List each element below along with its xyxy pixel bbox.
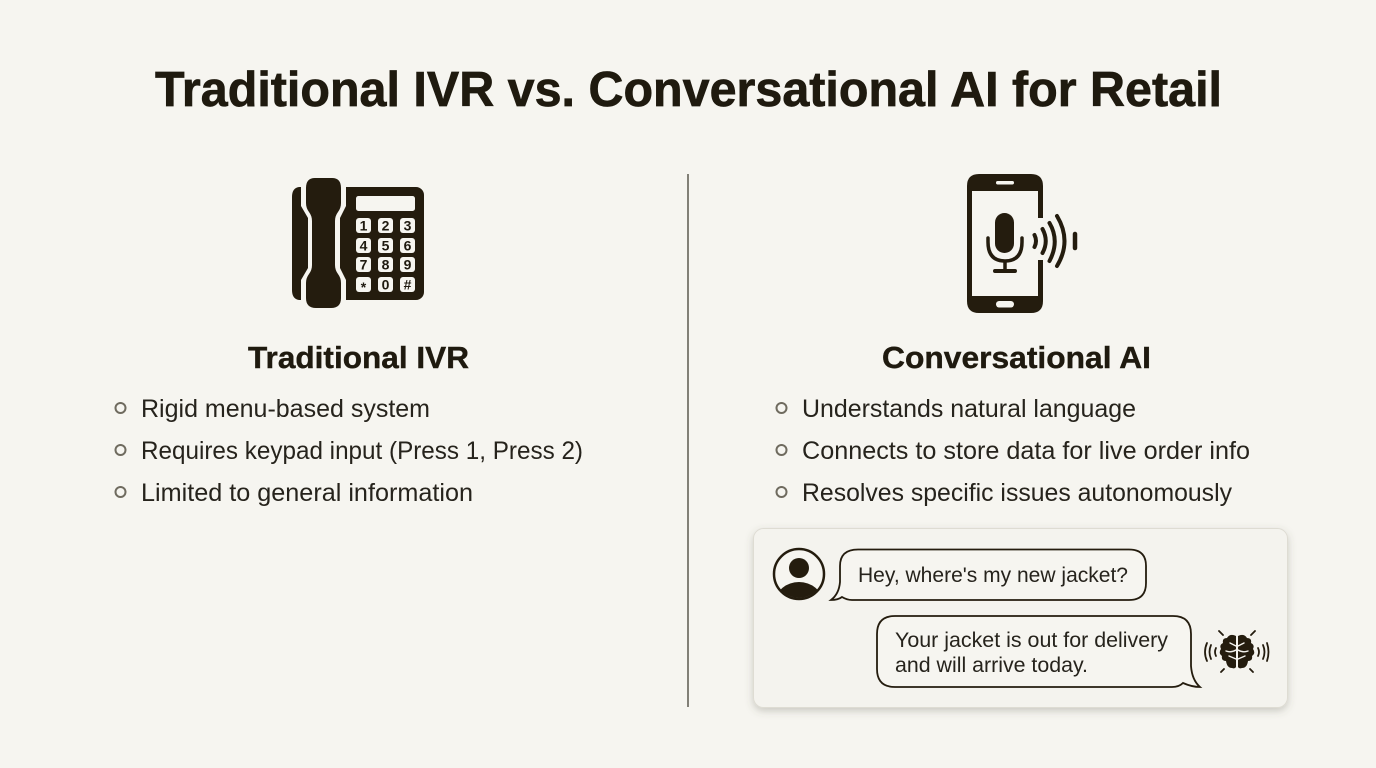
icon: customer avatar <box>772 548 826 600</box>
list: IVR limitations <box>116 395 583 507</box>
heading: Traditional IVR: Traditional IVR <box>248 340 469 375</box>
speech bubble: AI answer: Your jacket is out for delivery <box>895 629 1168 652</box>
divider <box>687 174 689 707</box>
list: AI capabilities <box>776 395 1250 507</box>
speech bubble: customer question: Hey, where's my new jacket? <box>858 564 1128 587</box>
panel: traditional IVR <box>116 178 583 507</box>
bullet: store data: Connects to store data for live order info <box>802 437 1250 465</box>
icon: desk telephone with keypad <box>292 178 424 308</box>
icon: desk telephone with keypad: 4 <box>360 238 368 254</box>
icon: desk telephone with keypad: # <box>404 276 412 292</box>
icon: desk telephone with keypad: 8 <box>382 256 390 272</box>
bullet: general information: Limited to general information <box>141 479 473 507</box>
icon: desk telephone with keypad: 3 <box>404 218 412 234</box>
icon: desk telephone with keypad: 5 <box>382 238 390 254</box>
speech bubble: customer question <box>831 550 1146 600</box>
speech bubble: AI answer <box>877 616 1200 687</box>
panel: conversational AI <box>754 174 1288 708</box>
bullet: rigid menu: Rigid menu-based system <box>141 395 430 423</box>
icon: smartphone with microphone and sound waves <box>967 174 1075 313</box>
panel: chat example <box>754 528 1288 708</box>
icon: desk telephone with keypad: 2 <box>382 218 390 234</box>
icon: desk telephone with keypad: 9 <box>404 256 412 272</box>
title: Traditional IVR vs. Conversational AI for Retail <box>155 62 1222 117</box>
bullet: keypad input: Requires keypad input (Press 1, Press 2) <box>141 437 583 465</box>
heading: Conversational AI: Conversational AI <box>882 340 1151 375</box>
bullet: natural language: Understands natural language <box>802 395 1136 423</box>
icon: desk telephone with keypad: 7 <box>360 256 368 272</box>
bullet: autonomous resolution: Resolves specific issues autonomously <box>802 479 1232 507</box>
speech bubble: AI answer: and will arrive today. <box>895 654 1088 677</box>
icon: desk telephone with keypad: 6 <box>404 238 412 254</box>
icon: desk telephone with keypad: 1 <box>360 218 368 234</box>
icon: desk telephone with keypad: 0 <box>382 276 390 292</box>
icon: AI brain with signal waves <box>1205 631 1268 672</box>
icon: desk telephone with keypad: * <box>361 279 367 295</box>
